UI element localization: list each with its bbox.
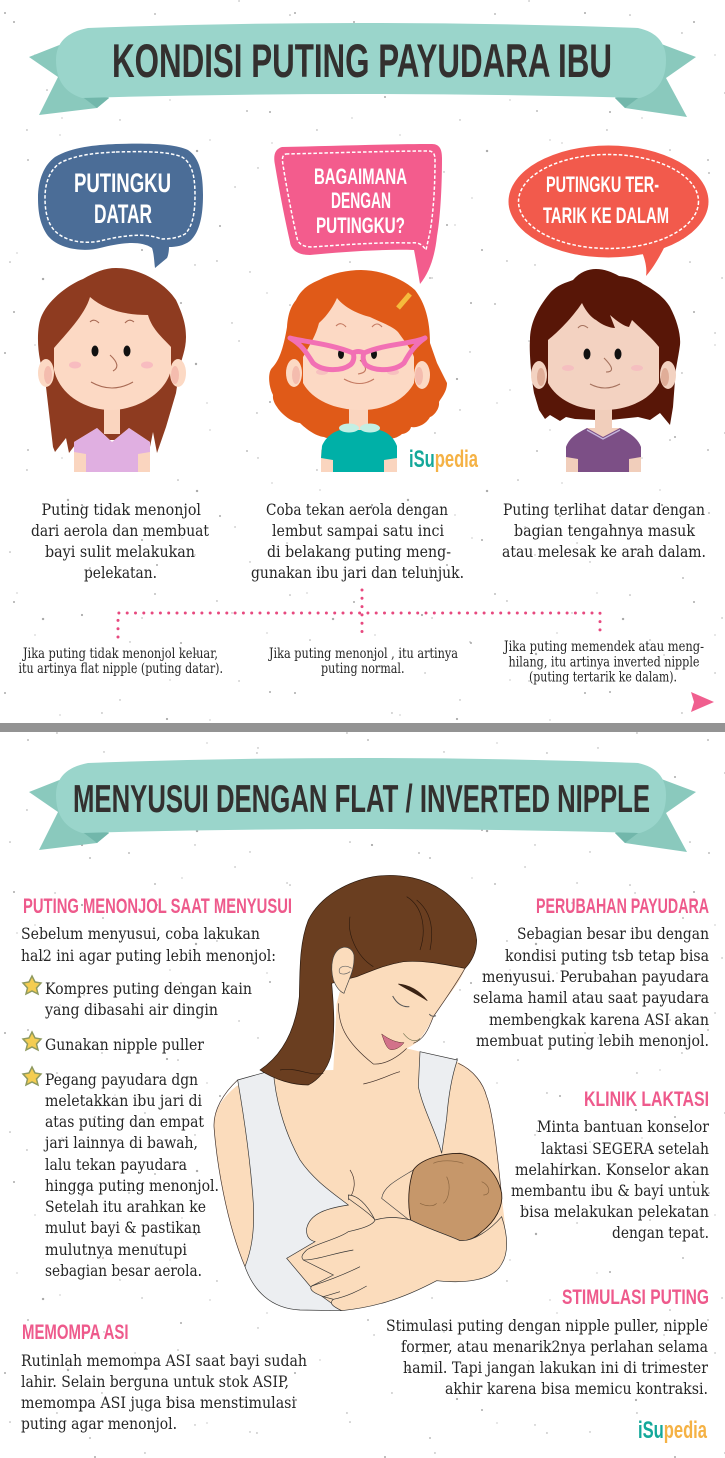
- logo: iSupedia: iSupedia: [409, 446, 478, 473]
- section: puting menonjol saat menyusui: PUTING MENONJOL SAAT MENYUSUI: [23, 895, 292, 918]
- text: test description: [251, 501, 464, 582]
- section: stimulasi puting: [386, 1286, 709, 1398]
- section: perubahan payudara: membengkak karena ASI akan: [489, 1011, 709, 1029]
- speech bubble: flat: DATAR: [94, 199, 152, 229]
- section: memompa ASI: lahir. Selain berguna untuk stok ASIP,: [21, 1373, 289, 1391]
- text: test description: Coba tekan aerola dengan: [266, 501, 448, 519]
- speech bubble: inverted: [508, 146, 708, 276]
- text: flat description: bayi sulit melakukan: [45, 543, 195, 561]
- result: flat nipple: Jika puting tidak menonjol keluar,: [21, 646, 218, 662]
- section: klinik laktasi: [511, 1088, 710, 1242]
- speech bubble: question: [274, 144, 442, 284]
- text: inverted description: bagian tengahnya masuk: [514, 522, 696, 540]
- result: normal: puting normal.: [321, 661, 404, 677]
- icon: star: [23, 1067, 41, 1085]
- section: puting menonjol saat menyusui: Sebelum menyusui, coba lakukan: [21, 925, 260, 943]
- bullet: pegang payudara: [43, 1071, 219, 1280]
- section: klinik laktasi: laktasi SEGERA setelah: [541, 1140, 709, 1158]
- section: klinik laktasi: bisa melakukan pelekatan: [520, 1203, 709, 1221]
- section: puting menonjol saat menyusui: hal2 ini agar puting lebih menonjol:: [21, 947, 276, 965]
- section: klinik laktasi: Minta bantuan konselor: [537, 1118, 710, 1136]
- panel: menyusui: [21, 758, 710, 1444]
- text: inverted description: [502, 501, 706, 561]
- text: test description: lembut sampai satu inci: [272, 522, 444, 540]
- icon: star: [23, 1032, 41, 1050]
- bullet: pegang payudara: sebagian besar aerola.: [45, 1262, 202, 1280]
- bullet: pegang payudara: mulut bayi & pastikan: [45, 1219, 201, 1237]
- bullet: pegang payudara: lalu tekan payudara: [45, 1156, 187, 1174]
- speech bubble: inverted: PUTINGKU TER-: [546, 172, 659, 197]
- speech bubble: question: DENGAN: [331, 188, 391, 213]
- bullet: kompres: Kompres puting dengan kain: [45, 980, 252, 998]
- speech bubble: flat: PUTINGKU: [74, 168, 171, 198]
- text: inverted description: Puting terlihat datar dengan: [503, 501, 705, 519]
- section: puting menonjol saat menyusui: [21, 895, 292, 1280]
- speech bubble: flat: [38, 144, 203, 268]
- text: test description: gunakan ibu jari dan telunjuk.: [251, 564, 464, 582]
- character: girl with inverted nipple: [530, 269, 680, 472]
- illustration: mother breastfeeding: [214, 875, 507, 1311]
- bullet: pegang payudara: hingga puting menonjol.: [45, 1177, 219, 1195]
- text: flat description: Puting tidak menonjol: [42, 501, 201, 519]
- result: normal: [267, 646, 458, 677]
- panel: kondisi puting: [18, 23, 714, 712]
- speech bubble: question: BAGAIMANA: [314, 164, 407, 189]
- bullet: nipple puller: Gunakan nipple puller: [45, 1036, 205, 1054]
- bullet: pegang payudara: atas puting dan empat: [45, 1113, 205, 1131]
- section: klinik laktasi: dengan tepat.: [612, 1224, 709, 1242]
- result: flat nipple: [18, 646, 223, 677]
- section: memompa ASI: memompa ASI juga bisa menstimulasi: [21, 1394, 296, 1412]
- section: stimulasi puting: akhir karena bisa memicu kontraksi.: [445, 1380, 708, 1398]
- result: flat nipple: itu artinya flat nipple (puting datar).: [18, 661, 223, 677]
- dotted connector: [118, 590, 600, 637]
- section: perubahan payudara: [473, 895, 709, 1050]
- text: flat description: pelekatan.: [84, 564, 157, 582]
- title ribbon: [29, 758, 696, 852]
- section: perubahan payudara: kondisi puting tsb tetap bisa: [505, 947, 709, 965]
- character: girl with flat nipple: [38, 268, 186, 472]
- divider bar: [0, 723, 725, 732]
- hair clip: [398, 294, 410, 308]
- section: perubahan payudara: membuat puting lebih menonjol.: [476, 1032, 709, 1050]
- text: test description: di belakang puting meng-: [267, 543, 451, 561]
- section: memompa ASI: Rutinlah memompa ASI saat bayi sudah: [21, 1352, 307, 1370]
- result: inverted nipple: [502, 639, 704, 686]
- text: flat description: dari aerola dan membuat: [31, 522, 210, 540]
- section: memompa ASI: puting agar menonjol.: [21, 1415, 177, 1433]
- bullet: pegang payudara: mulutnya menutupi: [45, 1241, 187, 1259]
- result: normal: Jika puting menonjol , itu artinya: [267, 646, 458, 662]
- glasses: [290, 338, 425, 370]
- text: inverted description: atau melesak ke arah dalam.: [502, 543, 706, 561]
- result: inverted nipple: (puting tertarik ke dalam).: [529, 670, 677, 686]
- bullet: kompres: [44, 980, 252, 1019]
- speech bubble: question: PUTINGKU?: [316, 213, 405, 238]
- section: memompa ASI: [21, 1321, 307, 1433]
- icon: star: [23, 976, 41, 994]
- bullet: kompres: yang dibasahi air dingin: [44, 1001, 218, 1019]
- section: memompa ASI: MEMOMPA ASI: [22, 1321, 128, 1344]
- section: klinik laktasi: melahirkan. Konselor akan: [515, 1161, 709, 1179]
- logo: iSupedia: iSupedia: [638, 1417, 707, 1444]
- bullet: pegang payudara: jari lainnya di bawah,: [43, 1134, 198, 1152]
- section: perubahan payudara: menyusui. Perubahan payudara: [482, 968, 709, 986]
- text: flat description: [31, 501, 210, 582]
- title ribbon: [29, 23, 696, 117]
- bullet: pegang payudara: Setelah itu arahkan ke: [45, 1198, 206, 1216]
- bullet: pegang payudara: meletakkan ibu jari di: [45, 1092, 202, 1110]
- bullet: pegang payudara: Pegang payudara dgn: [45, 1071, 198, 1089]
- character: girl with glasses: [269, 270, 447, 472]
- arrow: [691, 692, 714, 712]
